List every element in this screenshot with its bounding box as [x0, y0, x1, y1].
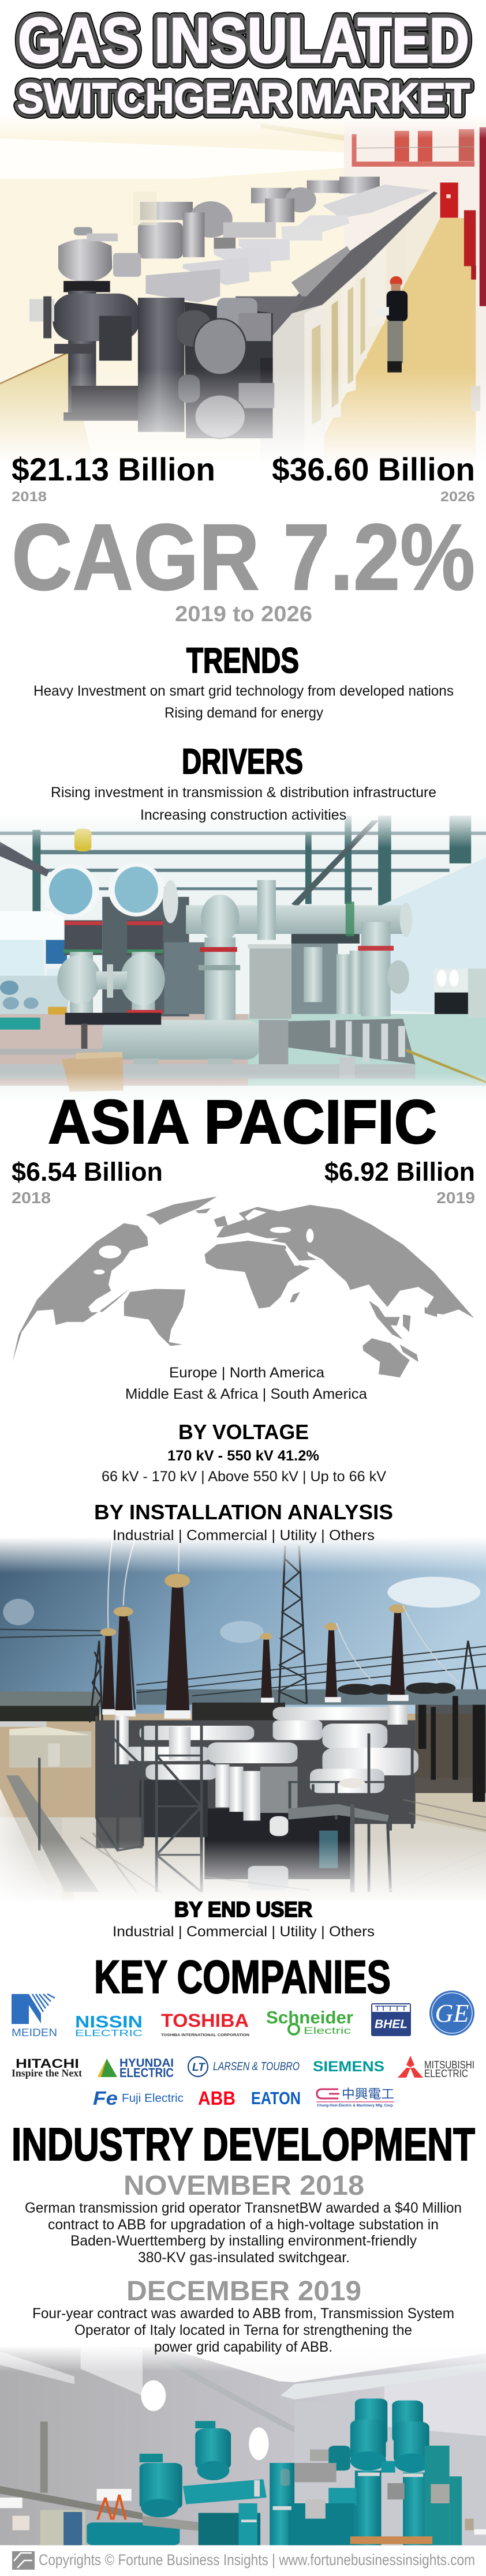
shadow lattice	[81, 1800, 486, 1892]
overhead wires	[0, 1629, 486, 1696]
logo: Schneider Electric: Schneider	[266, 2007, 353, 2027]
logo: Toshiba: TOSHIBA INTERNATIONAL CORPORATION	[161, 2033, 249, 2037]
market value 2026	[272, 451, 475, 505]
logo: GE	[429, 1991, 474, 2036]
Asia Pacific value 2019: $6.92 Billion	[324, 1157, 475, 1186]
South East Asia islands	[369, 1301, 403, 1339]
November 2018 description: contract to ABB for upgradation of a high-voltage substation in	[48, 2217, 439, 2233]
flanges	[42, 865, 99, 918]
dark backing of equipment	[96, 1720, 416, 1824]
logo: Eaton: EATON	[251, 2088, 301, 2108]
trends list	[33, 683, 454, 721]
December 2019 description	[32, 2305, 454, 2355]
voltage list: 66 kV - 170 kV | Above 550 kV | Up to 66 kV	[102, 1469, 386, 1485]
footer logo	[12, 2551, 35, 2570]
heading: key companies: KEY COMPANIES	[94, 1951, 391, 2003]
photo: gas insulated switchgear factory	[0, 784, 486, 1103]
CAGR period: 2019 to 2026	[175, 602, 312, 626]
logo: Nissin Electric: NISSIN	[75, 2013, 143, 2031]
logo: Hitachi: HITACHI	[16, 2056, 79, 2071]
supports	[259, 1020, 288, 1064]
trends list: Heavy Investment on smart grid technology from developed nations	[33, 683, 454, 699]
logo: Meiden: MEIDEN	[12, 2027, 57, 2038]
person	[390, 276, 402, 287]
logo: Chung-Hsin Electric: Chung-Hsin Electric & Machinery Mfg. Corp.	[317, 2104, 394, 2108]
footer	[0, 2545, 486, 2575]
logo: Schneider Electric: Electric	[304, 2025, 352, 2036]
South America	[124, 1289, 185, 1346]
November 2018 description: German transmission grid operator TransnetBW awarded a $40 Million	[25, 2200, 462, 2216]
logo: Fuji Electric	[93, 2087, 184, 2109]
front left unit	[58, 239, 112, 282]
market value 2018	[12, 451, 215, 505]
base frame	[0, 1064, 416, 1079]
logo: Hyundai Electric: ELECTRIC	[119, 2066, 174, 2080]
cabinet	[249, 945, 291, 1019]
heading: by voltage: BY VOLTAGE	[178, 1420, 309, 1444]
logo: Larsen and Toubro: LT	[192, 2061, 205, 2074]
bottom tank	[102, 1020, 259, 1060]
bellows	[65, 920, 102, 955]
logo: Larsen and Toubro: LARSEN & TOUBRO	[213, 2060, 300, 2073]
logo: Nissin Electric	[75, 2013, 143, 2038]
logo: Mitsubishi Electric: MITSUBISHI	[424, 2059, 474, 2071]
photo: indoor switchgear hall	[0, 92, 486, 464]
December 2019 description: Operator of Italy located in Terna for strengthening the	[74, 2322, 412, 2338]
ground	[0, 1714, 486, 1901]
Africa	[204, 1241, 310, 1308]
Asia Pacific value 2019	[324, 1157, 475, 1207]
logo: Chung-Hsin Electric: 中興電工	[342, 2087, 394, 2101]
date: December 2019: DECEMBER 2019	[126, 2276, 361, 2307]
bushings	[102, 1584, 405, 1716]
heading: Asia Pacific: ASIA PACIFIC	[48, 1087, 437, 1156]
photo: teal switchgear room	[0, 2330, 486, 2545]
logo: Hitachi	[12, 2056, 82, 2079]
installation list: Industrial | Commercial | Utility | Others	[113, 1527, 375, 1544]
dominant voltage share: 170 kV - 550 kV 41.2%	[167, 1448, 319, 1464]
dark mass behind	[102, 897, 189, 1016]
drivers list: Rising investment in transmission & distribution infrastructure	[51, 784, 436, 801]
Asia Pacific value 2018: 2018	[12, 1189, 51, 1207]
regions list	[125, 1365, 367, 1402]
title	[17, 5, 471, 123]
end user list: Industrial | Commercial | Utility | Others	[113, 1924, 375, 1940]
logo: Meiden	[12, 1994, 57, 2038]
drivers list	[51, 784, 436, 823]
heading: trends: TRENDS	[186, 641, 299, 680]
logo: Toshiba: TOSHIBA	[161, 2010, 249, 2031]
company logos	[12, 1991, 474, 2109]
logo: Hitachi: Inspire the Next	[12, 2067, 82, 2079]
white pipes	[273, 1707, 403, 1720]
heading: by end user: BY END USER	[174, 1898, 312, 1921]
Asia Pacific value 2019: 2019	[436, 1189, 475, 1207]
November 2018 description	[25, 2200, 462, 2266]
logo: Hyundai Electric	[98, 2057, 174, 2080]
Asia Pacific value 2018	[12, 1157, 163, 1207]
heading: drivers: DRIVERS	[182, 742, 303, 781]
UK and Iceland	[214, 1216, 228, 1227]
market value 2026: 2026	[440, 489, 475, 505]
market value 2026: $36.60 Billion	[272, 451, 475, 487]
drivers list: Increasing construction activities	[140, 807, 346, 823]
market value 2018: 2018	[12, 489, 47, 505]
top pipe	[186, 905, 406, 934]
December 2019 description: power grid capability of ABB.	[154, 2339, 332, 2355]
logo: Fuji Electric: Fe	[93, 2087, 118, 2109]
logo: Nissin Electric: ELECTRIC	[75, 2029, 143, 2038]
carton	[62, 1052, 124, 1092]
Asia Pacific value 2018: $6.54 Billion	[12, 1157, 163, 1186]
Eurasia	[216, 1205, 474, 1318]
building	[9, 1731, 91, 1768]
North America	[12, 1223, 148, 1362]
logo: Schneider Electric	[266, 2007, 353, 2036]
towers	[90, 1546, 477, 1722]
teal machines	[195, 2428, 231, 2470]
logo: BHEL	[371, 2003, 411, 2036]
Australia	[362, 1338, 410, 1377]
logo: Hyundai Electric: HYUNDAI	[119, 2057, 174, 2070]
November 2018 description: Baden-Wuerttemberg by installing environment-friendly	[70, 2233, 417, 2249]
logo: Larsen and Toubro	[188, 2057, 300, 2076]
logo: Fuji Electric: Fuji Electric	[122, 2092, 184, 2105]
logo: Mitsubishi Electric	[398, 2056, 474, 2079]
far pipes	[307, 181, 344, 193]
regions list: Europe | North America	[169, 1365, 324, 1381]
logo: GE: GE	[435, 1999, 469, 2027]
logo: Mitsubishi Electric: ELECTRIC	[424, 2068, 468, 2079]
seas and lakes	[88, 1210, 322, 1312]
date: November 2018: NOVEMBER 2018	[124, 2171, 364, 2201]
Greenland	[145, 1196, 217, 1225]
photo: outdoor substation	[0, 1523, 486, 1916]
heading: by installation analysis: BY INSTALLATION ANALYSIS	[94, 1500, 393, 1524]
logo: BHEL: BHEL	[375, 2018, 408, 2031]
vessels	[70, 952, 93, 1015]
logo: Siemens: SIEMENS	[313, 2059, 384, 2075]
regions list: Middle East & Africa | South America	[125, 1386, 367, 1402]
logo: ABB: ABB	[198, 2087, 235, 2109]
Madagascar	[290, 1292, 300, 1302]
world map globe	[12, 1196, 474, 1377]
far band	[0, 1692, 102, 1707]
trends list: Rising demand for energy	[165, 705, 323, 721]
December 2019 description: Four-year contract was awarded to ABB from, Transmission System	[32, 2305, 454, 2322]
box row	[322, 185, 431, 218]
market value 2018: $21.13 Billion	[12, 451, 215, 487]
logo: Chung-Hsin Electric	[316, 2087, 394, 2108]
November 2018 description: 380-KV gas-insulated switchgear.	[138, 2250, 350, 2266]
steel frames	[97, 1716, 412, 1892]
